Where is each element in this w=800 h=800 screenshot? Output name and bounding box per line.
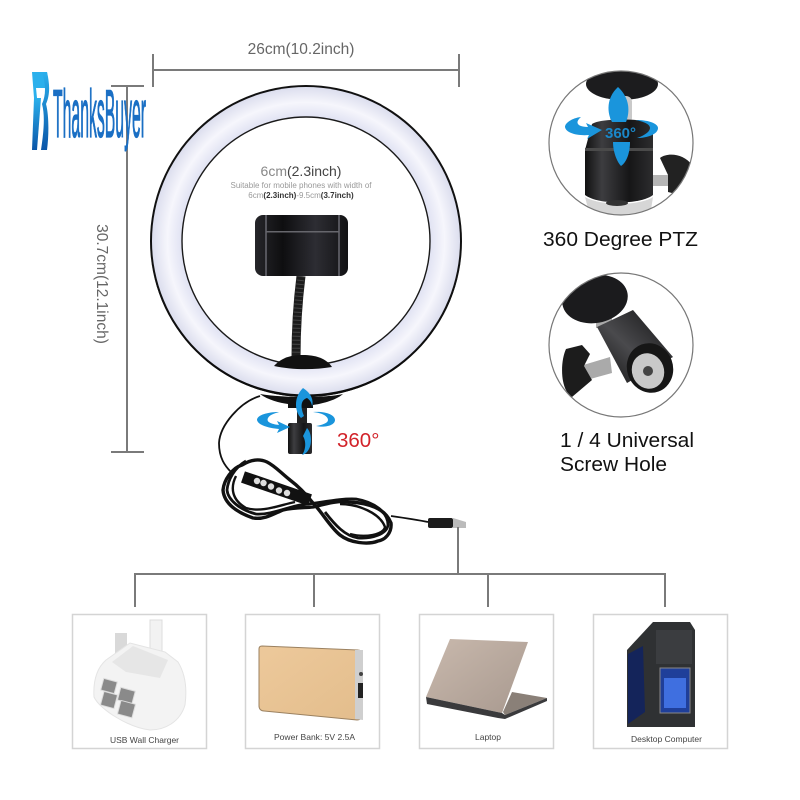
- panel: universal screw hole: [549, 270, 693, 417]
- label: 360 Degree PTZ: 360 Degree PTZ: [543, 228, 698, 251]
- phone size text: Suitable for mobile phones with width of: [231, 181, 372, 190]
- dimension: ring width: 26cm(10.2inch): [248, 41, 354, 58]
- label: 360 degrees: 360°: [337, 429, 379, 452]
- text: ThanksBuyer: [53, 76, 146, 152]
- panel: 360 degree PTZ: [549, 68, 693, 216]
- card: desktop computer: Desktop Computer: [631, 734, 702, 744]
- rotation arrows: [565, 87, 658, 166]
- phone size text: [231, 163, 372, 200]
- card: power bank: Power Bank: 5V 2.5A: [274, 732, 355, 742]
- card: USB wall charger: USB Wall Charger: [110, 735, 179, 745]
- card: USB wall charger: [72, 614, 206, 748]
- card: laptop: Laptop: [475, 732, 501, 742]
- label: universal screw hole: [560, 429, 694, 476]
- logo: ThanksBuyer: [32, 72, 146, 152]
- label: universal screw hole: Screw Hole: [560, 453, 667, 476]
- gooseneck and base: [274, 276, 332, 369]
- card: desktop computer: [594, 614, 728, 748]
- card: power bank: [246, 614, 380, 748]
- controller buttons: [254, 478, 290, 496]
- phone size text: 6cm(2.3inch)-9.5cm(3.7inch): [248, 191, 354, 200]
- connector lines: [134, 527, 666, 607]
- USB plug: [428, 518, 466, 528]
- dimension: ring height: 30.7cm(12.1inch): [93, 224, 110, 344]
- ball mount with rotation arrows: [257, 388, 343, 455]
- phone size text: 6cm(2.3inch): [261, 163, 341, 179]
- 360 label: 360°: [605, 125, 636, 142]
- phone clamp: [255, 215, 348, 276]
- label: universal screw hole: 1 / 4 Universal: [560, 429, 694, 452]
- cable and controller: [219, 396, 428, 543]
- card: laptop: [420, 614, 554, 748]
- ring light: [150, 85, 462, 397]
